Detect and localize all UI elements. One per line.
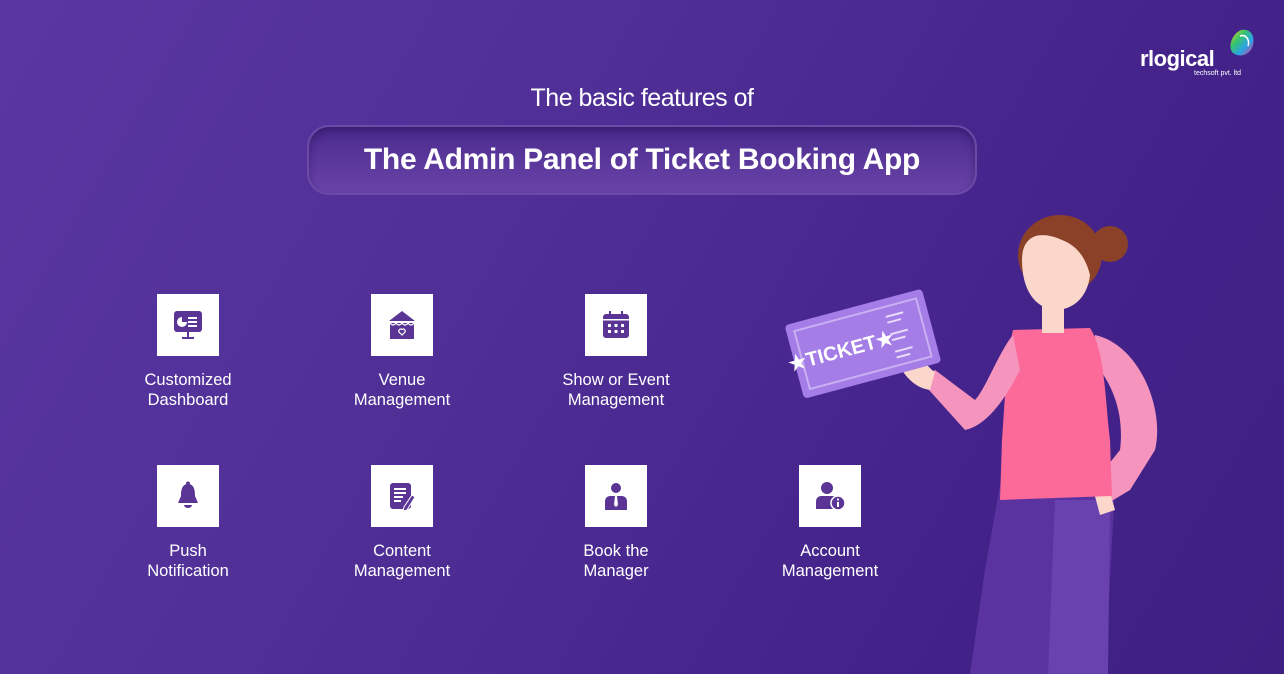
feature: Content Management: Management	[354, 562, 450, 580]
neck	[1042, 305, 1064, 333]
pants	[970, 485, 1115, 674]
feature: Venue Management	[354, 294, 450, 409]
feature: Book the Manager	[583, 465, 649, 580]
feature: Show or Event Management: Management	[568, 391, 664, 409]
feature: Account Management: Account	[800, 542, 860, 560]
logo text: rlogical	[1140, 46, 1214, 71]
title pill: The Admin Panel of Ticket Booking App	[364, 143, 920, 176]
ticket: ★TICKET★	[786, 327, 896, 376]
feature: Account Management: Management	[782, 562, 878, 580]
logo	[1140, 30, 1254, 77]
ticket	[779, 289, 941, 400]
title pill	[307, 125, 977, 195]
feature: Book the Manager: Book the	[583, 542, 649, 560]
feature: Customized Dashboard: Customized	[144, 371, 232, 389]
hair bun	[1092, 226, 1128, 262]
feature: Push Notification	[147, 465, 229, 580]
feature: Customized Dashboard	[144, 294, 232, 409]
logo: techsoft pvt. ltd	[1194, 70, 1241, 77]
feature: Content Management: Content	[373, 542, 431, 560]
feature: Book the Manager: Manager	[583, 562, 649, 580]
feature: Customized Dashboard: Dashboard	[148, 391, 228, 409]
front arm	[920, 335, 1020, 430]
feature: Venue Management: Management	[354, 391, 450, 409]
back arm	[1092, 335, 1157, 505]
subtitle: The basic features of	[531, 84, 753, 112]
illustration: woman holding ticket	[785, 215, 1158, 674]
hand	[896, 350, 935, 390]
feature: Push Notification: Push	[169, 542, 207, 560]
torso	[1000, 328, 1112, 500]
feature: Content Management	[354, 465, 450, 580]
head	[1018, 215, 1102, 310]
logo icon	[1230, 30, 1254, 56]
feature: Account Management	[782, 465, 878, 580]
feature: Show or Event Management	[562, 294, 670, 409]
feature: Venue Management: Venue	[379, 371, 425, 389]
feature: Show or Event Management: Show or Event	[562, 371, 670, 389]
feature: Push Notification: Notification	[147, 562, 229, 580]
